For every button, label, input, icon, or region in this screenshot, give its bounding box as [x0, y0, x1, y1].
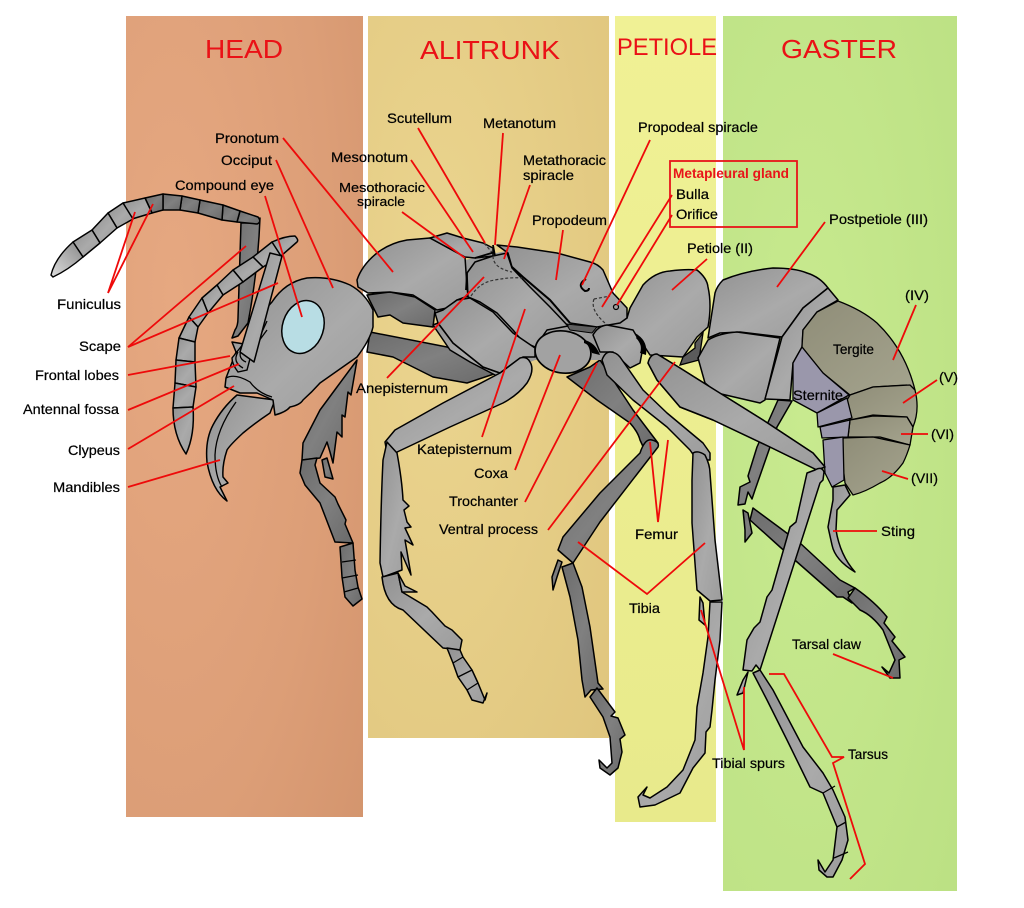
- label: scape: Scape: [79, 338, 121, 354]
- label: metanotum: [483, 115, 556, 245]
- spiracles and sutures: [466, 243, 618, 323]
- panel: gaster: [723, 16, 957, 891]
- near scape: [240, 253, 282, 362]
- near hind tibia and tarsus: [737, 468, 848, 877]
- label: mesonotum: [331, 149, 473, 252]
- label: clypeus: Clypeus: [68, 442, 120, 458]
- petiole joint: [680, 333, 703, 365]
- heading: alitrunk: ALITRUNK: [420, 35, 561, 65]
- label: petiole II: Petiole (II): [687, 240, 753, 256]
- sting: [828, 485, 855, 572]
- label: mesothoracic spiracle: [339, 180, 465, 258]
- label: mesothoracic spiracle: spiracle: [357, 194, 405, 209]
- thorax underlay: [370, 250, 640, 375]
- label: tarsal claw: Tarsal claw: [792, 636, 862, 652]
- petiole node: [610, 270, 710, 357]
- label: V: (V): [939, 369, 958, 385]
- frontal lobes: [232, 313, 262, 372]
- label: coxa: Coxa: [474, 465, 508, 481]
- near front coxa region: [433, 298, 535, 376]
- front leg under head: [300, 360, 362, 606]
- label: tibial spurs: [701, 610, 785, 771]
- label: bulla: Bulla: [676, 186, 709, 202]
- label: IV: (IV): [905, 287, 929, 303]
- label: tarsal claw: [792, 636, 893, 678]
- panel: petiole: [615, 16, 717, 822]
- label: postpetiole III: [777, 211, 928, 287]
- label: scutellum: Scutellum: [387, 110, 452, 126]
- label: occiput: Occiput: [221, 152, 272, 168]
- near middle femur: [602, 352, 710, 460]
- label: VI: (VI): [931, 426, 954, 442]
- panel: head: [126, 16, 363, 817]
- label: metapleural gland: Metapleural gland: [673, 165, 789, 181]
- label: mandibles: Mandibles: [53, 479, 120, 495]
- label: sting: [833, 523, 915, 539]
- label: bulla: [602, 186, 709, 307]
- label: VII: [882, 470, 938, 486]
- label: frontal lobes: [35, 356, 230, 383]
- callout box: metapleural gland: [670, 161, 797, 227]
- label: metathoracic spiracle: Metathoracic: [523, 152, 606, 168]
- label: mesothoracic spiracle: Mesothoracic: [339, 180, 426, 195]
- label: tibia: Tibia: [629, 600, 660, 616]
- middle coxa: [532, 325, 646, 377]
- label: ventral process: [439, 362, 675, 537]
- label: clypeus: [68, 386, 234, 458]
- label: propodeum: [532, 212, 607, 280]
- mesopleuron: [467, 253, 568, 347]
- label: postpetiole III: Postpetiole (III): [829, 211, 928, 227]
- heading: petiole: PETIOLE: [617, 34, 717, 61]
- label: compound eye: [175, 177, 302, 317]
- label: femur: Femur: [635, 526, 678, 542]
- gaster: [698, 268, 917, 495]
- label: VII: (VII): [911, 470, 938, 486]
- ant illustration: [51, 194, 917, 877]
- label: sting: Sting: [881, 523, 915, 539]
- far middle leg: [552, 360, 658, 775]
- label: IV: [893, 287, 929, 360]
- label: V: [903, 369, 958, 403]
- far antenna: [51, 194, 260, 338]
- label: tibia: [578, 542, 705, 616]
- label: orifice: [617, 206, 718, 305]
- panel: alitrunk: [368, 16, 609, 738]
- near antenna: [173, 236, 298, 454]
- label: occiput: [221, 152, 333, 288]
- label: tarsus: [769, 674, 888, 879]
- label: katepisternum: [417, 309, 525, 457]
- label: funiculus: Funiculus: [57, 296, 121, 312]
- near hind femur base hidden part: [648, 354, 825, 470]
- label: compound eye: Compound eye: [175, 177, 274, 193]
- compound eye: [275, 295, 331, 359]
- label: metathoracic spiracle: spiracle: [523, 167, 574, 183]
- label: coxa: [474, 355, 560, 481]
- propodeum: [497, 245, 627, 327]
- label: sternite: Sternite: [793, 387, 843, 403]
- label: mesonotum: Mesonotum: [331, 149, 408, 165]
- far front femur: [367, 332, 497, 383]
- label: trochanter: Trochanter: [449, 493, 518, 509]
- label: funiculus: [57, 204, 153, 312]
- label: metanotum: Metanotum: [483, 115, 556, 131]
- label: scutellum: [387, 110, 485, 243]
- near front leg: [380, 358, 532, 703]
- label: scape: [79, 246, 278, 354]
- label: propodeal spiracle: Propodeal spiracle: [638, 119, 758, 135]
- label: ventral process: Ventral process: [439, 521, 538, 537]
- label: orifice: Orifice: [676, 206, 718, 222]
- head capsule: [225, 253, 373, 415]
- label: anepisternum: [356, 277, 484, 396]
- label: propodeum: Propodeum: [532, 212, 607, 228]
- label: tibial spurs: Tibial spurs: [712, 755, 785, 771]
- heading: gaster: GASTER: [781, 34, 897, 64]
- label: mandibles: [53, 460, 220, 495]
- pronotum: [357, 233, 493, 327]
- label: femur: [635, 440, 678, 542]
- label: propodeal spiracle: [582, 119, 758, 285]
- dark strip above coxa: [566, 324, 597, 333]
- label: trochanter: [449, 363, 597, 509]
- label: tergite: Tergite: [833, 341, 874, 357]
- label: pronotum: Pronotum: [215, 130, 279, 146]
- label: tarsus: Tarsus: [848, 746, 888, 762]
- near hind femur: [648, 354, 825, 470]
- heading: head: HEAD: [205, 34, 283, 64]
- label: pronotum: [215, 130, 393, 272]
- near middle tibia and tarsus: [638, 452, 722, 807]
- label: metathoracic spiracle: [504, 152, 606, 259]
- label: antennal fossa: [23, 364, 239, 417]
- label: petiole II: [672, 240, 753, 290]
- far hind leg: [738, 400, 905, 678]
- label: frontal lobes: Frontal lobes: [35, 367, 119, 383]
- mandibles: [207, 395, 275, 501]
- label: anepisternum: Anepisternum: [356, 380, 448, 396]
- label: VI: [901, 426, 954, 442]
- label: antennal fossa: Antennal fossa: [23, 401, 119, 417]
- label: katepisternum: Katepisternum: [417, 441, 512, 457]
